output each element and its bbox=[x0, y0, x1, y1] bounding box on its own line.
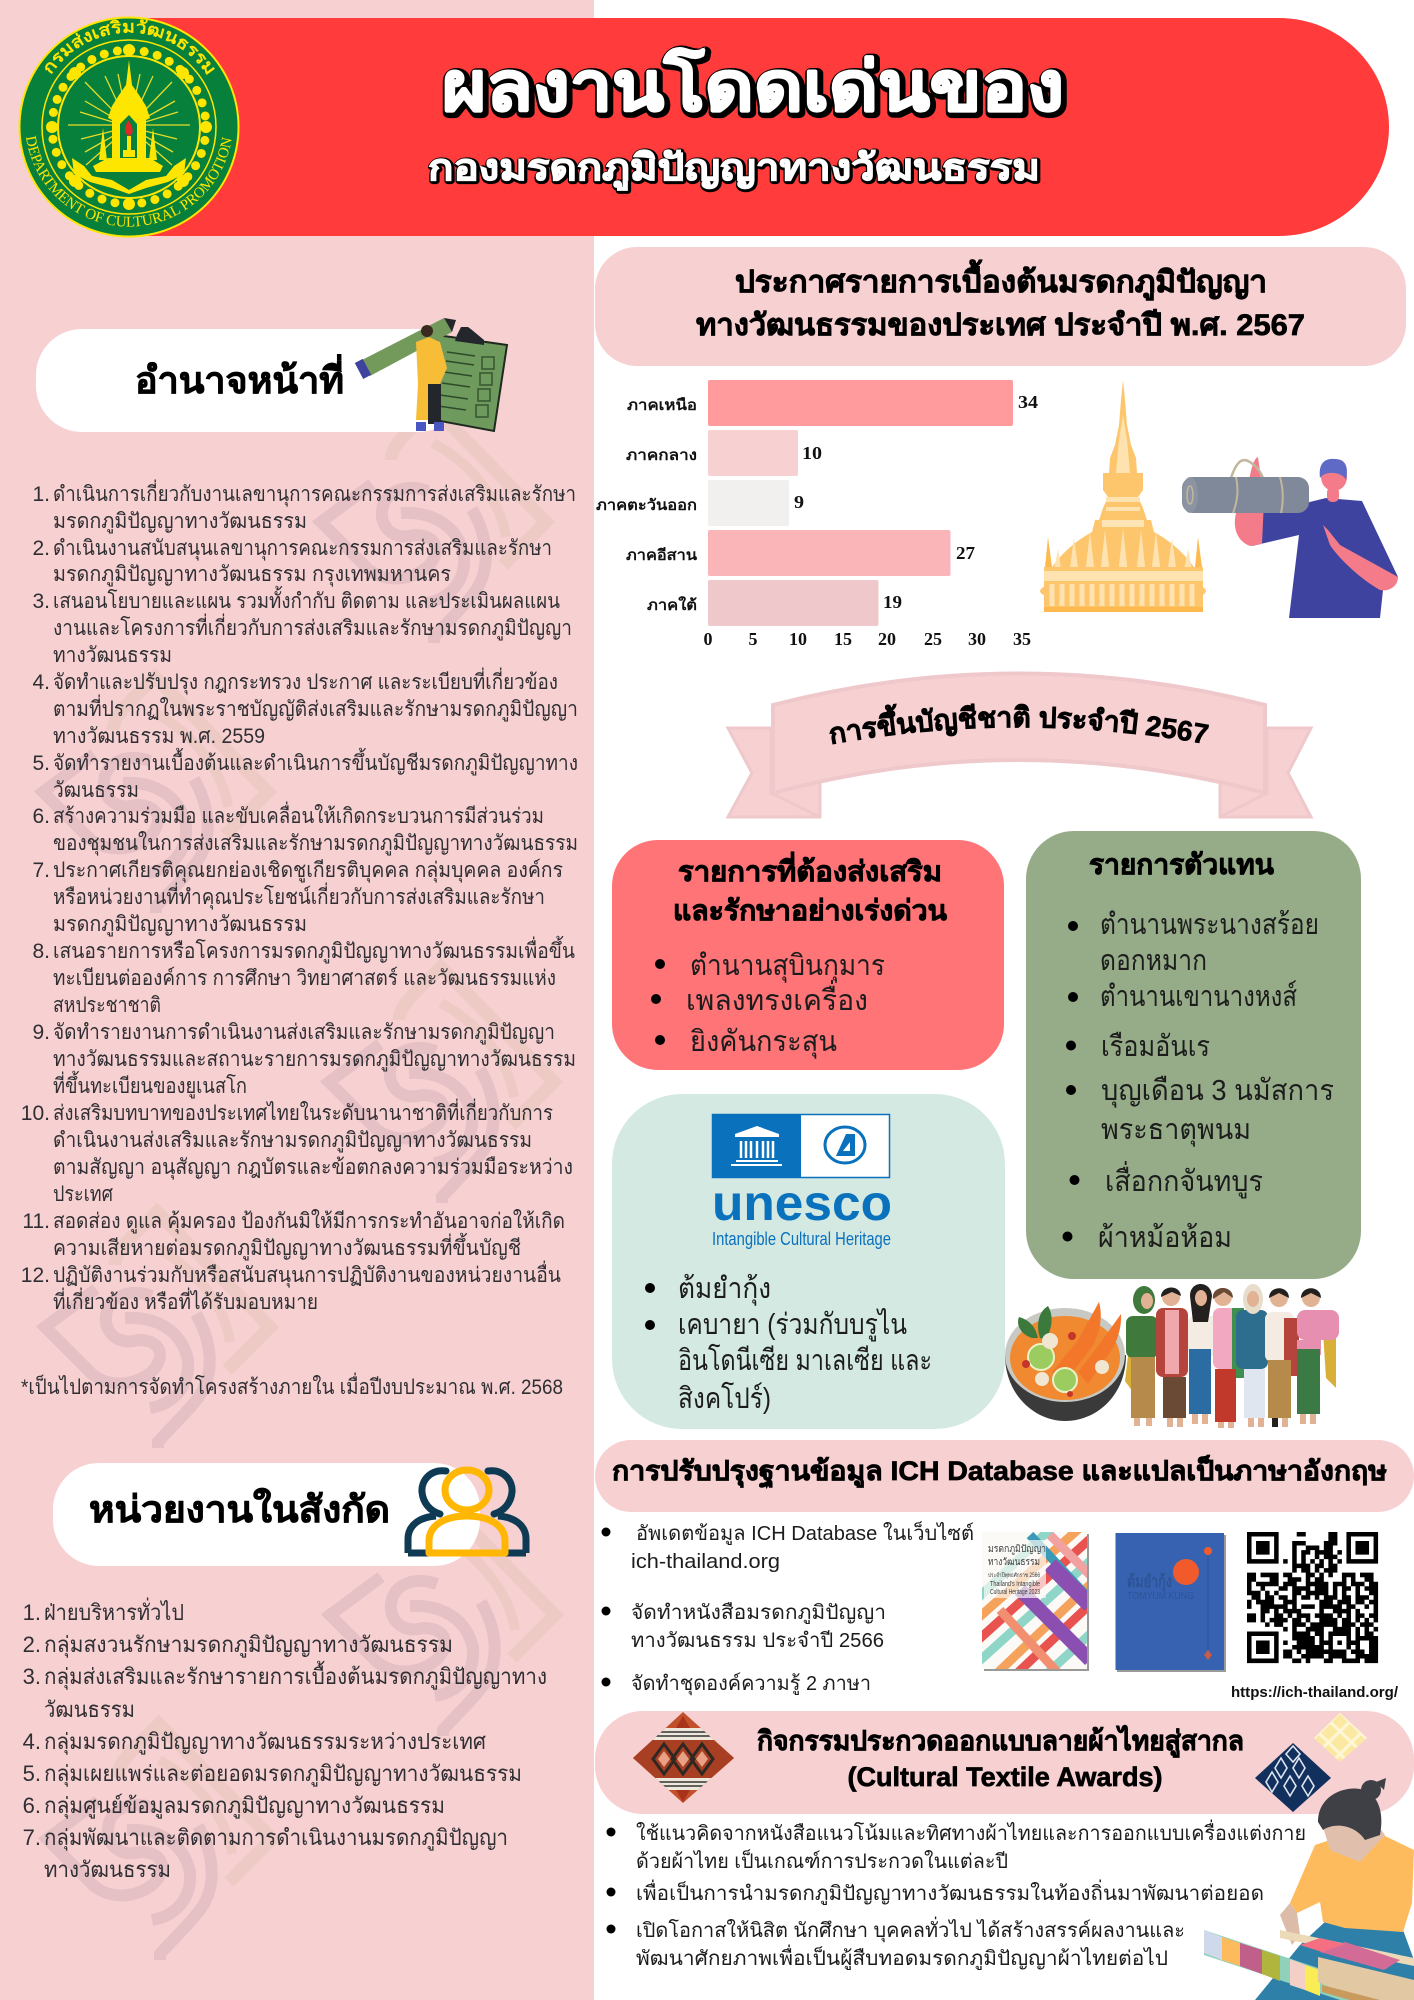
duties list: เสนอนโยบายและแผน รวมทั้งกำกับ ติดตาม และประเมินผลแผน bbox=[53, 586, 560, 613]
background: left pink column bbox=[0, 0, 594, 2000]
duties list: ทางวัฒนธรรม bbox=[53, 644, 172, 667]
textile awards bullet list: ด้วยผ้าไทย เป็นเกณฑ์การประกวดในแต่ละปี bbox=[636, 1848, 1008, 1873]
panel: representative items: รายการตัวแทน bbox=[1089, 849, 1274, 880]
duties list: 5. bbox=[32, 752, 50, 775]
duties list bbox=[21, 479, 578, 1314]
panel: representative items: เรือมอันเร bbox=[1101, 1031, 1210, 1063]
figure 3 bbox=[1188, 1284, 1220, 1424]
footnote: *เป็นไปตามการจัดทำโครงสร้างภายใน เมื่อปีงบประมาณ พ.ศ. 2568 bbox=[21, 1372, 563, 1399]
units list: 7. bbox=[23, 1825, 41, 1850]
subtitle: กองมรดกภูมิปัญญาทางวัฒนธรรม bbox=[429, 148, 1041, 192]
icon: department seal: กรมส่งเสริมวัฒนธรรม bbox=[45, 20, 215, 75]
icon: UNESCO ICH logo: unesco bbox=[712, 1175, 892, 1231]
duties list: เสนอรายการหรือโครงการมรดกภูมิปัญญาทางวัฒนธรรมเพื่อขึ้น bbox=[53, 936, 575, 964]
duties list: ทางวัฒนธรรมและสถานะรายการมรดกภูมิปัญญาทางวัฒนธรรม bbox=[53, 1048, 576, 1072]
bar chart: items per region: 0 bbox=[704, 629, 712, 649]
bar chart: items per region: ภาคเหนือ bbox=[627, 397, 697, 414]
book cover: Tom Yum Kung: TOMYUM KUNG bbox=[1127, 1591, 1194, 1602]
ICH database bullet list: จัดทำชุดองค์ความรู้ 2 ภาษา bbox=[631, 1672, 871, 1696]
icon: tom yum kung bowl bbox=[1005, 1302, 1126, 1421]
duties list: จัดทำรายงานเบื้องต้นและดำเนินการขึ้นบัญชีมรดกภูมิปัญญาทาง bbox=[53, 748, 578, 776]
ICH database bullet list bbox=[602, 1520, 974, 1696]
panel: preliminary inventory heading: ประกาศรายการเบื้องต้นมรดกภูมิปัญญา bbox=[735, 259, 1267, 301]
duties list: จัดทำรายงานการดำเนินงานส่งเสริมและรักษามรดกภูมิปัญญา bbox=[53, 1021, 555, 1045]
panel: preliminary inventory heading: ทางวัฒนธรรมของประเทศ ประจำปี พ.ศ. 2567 bbox=[696, 309, 1305, 342]
duties list: หรือหน่วยงานที่ทำคุณประโยชน์เกี่ยวกับการส่งเสริมและรักษา bbox=[53, 882, 545, 910]
duties list: มรดกภูมิปัญญาทางวัฒนธรรม bbox=[53, 913, 307, 937]
duties list: ดำเนินงานสนับสนุนเลขานุการคณะกรรมการส่งเสริมและรักษา bbox=[53, 537, 552, 561]
heading: affiliated units card: หน่วยงานในสังกัด bbox=[89, 1487, 390, 1530]
ICH database bullet list: ทางวัฒนธรรม ประจำปี 2566 bbox=[631, 1630, 884, 1652]
panel: Cultural Textile Awards heading: (Cultural Textile Awards) bbox=[848, 1762, 1162, 1792]
units list: 5. bbox=[23, 1761, 41, 1786]
icon: group of women in kebaya bbox=[1125, 1284, 1339, 1428]
duties list: วัฒนธรรม bbox=[53, 779, 139, 802]
header banner bbox=[130, 18, 1389, 236]
units list: กลุ่มเผยแพร่และต่อยอดมรดกภูมิปัญญาทางวัฒนธรรม bbox=[44, 1761, 522, 1787]
bar chart: items per region: 30 bbox=[968, 629, 986, 649]
website URL: https://ich-thailand.org/ bbox=[1231, 1684, 1399, 1701]
panel: representative items: เสื่อกกจันทบูร bbox=[1105, 1161, 1263, 1199]
duties list: มรดกภูมิปัญญาทางวัฒนธรรม กรุงเทพมหานคร bbox=[53, 563, 451, 587]
bar chart: items per region: ภาคตะวันออก bbox=[596, 497, 697, 514]
duties list: 4. bbox=[32, 671, 50, 694]
panel: representative items: พระธาตุพนม bbox=[1101, 1114, 1251, 1147]
panel: Cultural Textile Awards heading: กิจกรรมประกวดออกแบบลายผ้าไทยสู่สากล bbox=[757, 1725, 1244, 1758]
duties list: ดำเนินงานส่งเสริมและรักษามรดกภูมิปัญญาทางวัฒนธรรม bbox=[53, 1129, 532, 1153]
icon: group of people bbox=[408, 1470, 526, 1553]
panel: UNESCO representative items: สิงคโปร์) bbox=[678, 1381, 771, 1415]
textile awards bullet list: พัฒนาศักยภาพเพื่อเป็นผู้สืบทอดมรดกภูมิปัญญาผ้าไทยต่อไป bbox=[636, 1944, 1168, 1971]
duties list: 1. bbox=[32, 483, 50, 506]
duties list: ทางวัฒนธรรม พ.ศ. 2559 bbox=[53, 725, 265, 748]
bar chart: items per region: 10 bbox=[802, 443, 822, 463]
ICH database bullet list: ich-thailand.org bbox=[631, 1551, 780, 1573]
duties list: ประเทศ bbox=[53, 1183, 114, 1206]
units list: กลุ่มมรดกภูมิปัญญาทางวัฒนธรรมระหว่างประเทศ bbox=[44, 1729, 486, 1755]
panel: UNESCO representative items: เคบายา (ร่วมกับบรูไน bbox=[678, 1307, 907, 1342]
duties list: ของชุมชนในการส่งเสริมและรักษามรดกภูมิปัญญาทางวัฒนธรรม bbox=[53, 831, 578, 856]
illustration: woman weaving at a loom bbox=[1204, 1778, 1414, 2000]
icon: UNESCO ICH logo bbox=[712, 1114, 892, 1249]
bar chart: items per region: 15 bbox=[834, 629, 852, 649]
duties list: ทะเบียนต่อองค์การ การศึกษา วิทยาศาสตร์ และวัฒนธรรมแห่ง bbox=[53, 966, 556, 990]
units list: กลุ่มสงวนรักษามรดกภูมิปัญญาทางวัฒนธรรม bbox=[44, 1632, 453, 1658]
duties list: 11. bbox=[22, 1210, 50, 1233]
duties list: 10. bbox=[21, 1102, 50, 1125]
textile awards bullet list bbox=[606, 1819, 1306, 1971]
duties list: ประกาศเกียรติคุณยกย่องเชิดชูเกียรติบุคคล กลุ่มบุคคล องค์กร bbox=[53, 858, 563, 883]
panel: urgent safeguarding items bbox=[612, 840, 1004, 1070]
textile awards bullet list: เปิดโอกาสให้นิสิต นักศึกษา บุคคลทั่วไป ได้สร้างสรรค์ผลงานและ bbox=[636, 1916, 1185, 1943]
duties list: จัดทำและปรับปรุง กฎกระทรวง ประกาศ และระเบียบที่เกี่ยวข้อง bbox=[53, 667, 558, 695]
duties list: 8. bbox=[32, 940, 50, 963]
duties list: 3. bbox=[32, 590, 50, 613]
units list: ฝ่ายบริหารทั่วไป bbox=[44, 1597, 184, 1625]
icon: navy textile pattern bbox=[1255, 1743, 1331, 1812]
units list: 2. bbox=[23, 1632, 41, 1657]
bar chart: items per region bbox=[596, 380, 1038, 649]
book cover: Tom Yum Kung: ต้มยำกุ้ง bbox=[1127, 1572, 1172, 1592]
title: ผลงานโดดเด่นของ bbox=[444, 49, 1066, 127]
panel: representative items: ตำนานพระนางสร้อย bbox=[1100, 909, 1319, 941]
icon: yellow textile pattern bbox=[1314, 1713, 1367, 1762]
duties list: ดำเนินการเกี่ยวกับงานเลขานุการคณะกรรมการส่งเสริมและรักษา bbox=[53, 479, 576, 507]
duties list: งานและโครงการที่เกี่ยวกับการส่งเสริมและรักษามรดกภูมิปัญญา bbox=[53, 613, 572, 641]
icon: man carrying rolled mat bbox=[1182, 457, 1398, 618]
ICH database bullet list: จัดทำหนังสือมรดกภูมิปัญญา bbox=[631, 1602, 886, 1625]
book cover: ICH 2023: ประจำปีพุทธศักราช 2566 bbox=[988, 1571, 1041, 1579]
duties list: ที่เกี่ยวข้อง หรือที่ได้รับมอบหมาย bbox=[53, 1287, 318, 1314]
book cover: ICH 2023: Thailand's Intangible bbox=[990, 1581, 1040, 1588]
textile awards bullet list: เพื่อเป็นการนำมรดกภูมิปัญญาทางวัฒนธรรมในท้องถิ่นมาพัฒนาต่อยอด bbox=[636, 1879, 1264, 1906]
heading: duties card: อำนาจหน้าที่ bbox=[135, 354, 344, 401]
units list: วัฒนธรรม bbox=[44, 1697, 135, 1722]
panel: urgent safeguarding items: ยิงคันกระสุน bbox=[690, 1026, 837, 1059]
panel: representative items: ดอกหมาก bbox=[1100, 945, 1207, 977]
figure 6 bbox=[1265, 1288, 1299, 1427]
duties list: 2. bbox=[32, 537, 50, 560]
duties list: 12. bbox=[21, 1264, 50, 1287]
duties list: ตามสัญญา อนุสัญญา กฎบัตรและข้อตกลงความร่วมมือระหว่าง bbox=[53, 1156, 573, 1180]
units list: 4. bbox=[23, 1729, 41, 1754]
ICH database bullet list: อัพเดตข้อมูล ICH Database ในเว็บไซต์ bbox=[636, 1520, 974, 1546]
duties list: สอดส่อง ดูแล คุ้มครอง ป้องกันมิให้มีการกระทำอันอาจก่อให้เกิด bbox=[53, 1209, 565, 1234]
panel: UNESCO representative items bbox=[612, 1094, 1005, 1429]
duties list: มรดกภูมิปัญญาทางวัฒนธรรม bbox=[53, 510, 307, 534]
panel: urgent safeguarding items: เพลงทรงเครื่อง bbox=[686, 980, 868, 1017]
book cover: ICH 2023: มรดกภูมิปัญญา bbox=[988, 1544, 1046, 1555]
duties list: ปฏิบัติงานร่วมกับหรือสนับสนุนการปฏิบัติงานของหน่วยงานอื่น bbox=[53, 1260, 561, 1288]
units list bbox=[23, 1597, 547, 1882]
bar chart: items per region: 5 bbox=[748, 629, 758, 649]
bar chart: items per region: 34 bbox=[1018, 392, 1038, 412]
duties list: ส่งเสริมบทบาทของประเทศไทยในระดับนานาชาติที่เกี่ยวกับการ bbox=[53, 1098, 553, 1125]
book cover: ICH 2023 bbox=[982, 1532, 1089, 1671]
bar chart: items per region: 25 bbox=[924, 629, 942, 649]
decorative watermark motifs bbox=[43, 407, 555, 1960]
banner ribbon: national inventory bbox=[726, 672, 1314, 818]
units list: กลุ่มส่งเสริมและรักษารายการเบื้องต้นมรดกภูมิปัญญาทาง bbox=[44, 1661, 547, 1690]
panel: Cultural Textile Awards heading bbox=[595, 1711, 1414, 1814]
figure 5 bbox=[1236, 1284, 1268, 1427]
panel: UNESCO representative items: ต้มยำกุ้ง bbox=[678, 1273, 771, 1306]
figure 2 bbox=[1156, 1287, 1188, 1427]
panel: urgent safeguarding items: ตำนานสุบินกุมาร bbox=[690, 950, 885, 983]
icon: department seal bbox=[18, 16, 240, 238]
panel: ICH database heading: การปรับปรุงฐานข้อมูล ICH Database และแปลเป็นภาษาอังกฤษ bbox=[612, 1453, 1387, 1489]
duties list: 7. bbox=[32, 859, 50, 882]
panel: representative items bbox=[1026, 831, 1361, 1279]
units list: 1. bbox=[23, 1600, 41, 1625]
bar chart: items per region: 9 bbox=[794, 492, 804, 512]
panel: urgent safeguarding items: รายการที่ต้องส่งเสริม bbox=[678, 851, 942, 887]
units list: 6. bbox=[23, 1793, 41, 1818]
panel: representative items: บุญเดือน 3 นมัสการ bbox=[1101, 1075, 1334, 1108]
book cover: Tom Yum Kung bbox=[1116, 1533, 1226, 1672]
icon: department seal: DEPARTMENT OF CULTURAL PROMOTION bbox=[26, 136, 232, 227]
subtitle: กองมรดกภูมิปัญญาทางวัฒนธรรม bbox=[428, 147, 1040, 191]
icon: person with giant pencil and checklist bbox=[355, 318, 507, 431]
figure 1 bbox=[1125, 1286, 1158, 1426]
duties list: 6. bbox=[32, 805, 50, 828]
duties list: 9. bbox=[32, 1021, 50, 1044]
bar chart: items per region: 19 bbox=[883, 592, 902, 612]
figure 4 bbox=[1213, 1288, 1244, 1428]
units list: ทางวัฒนธรรม bbox=[44, 1857, 171, 1882]
icon: orange textile pattern bbox=[633, 1712, 735, 1804]
duties list: สร้างความร่วมมือ และขับเคลื่อนให้เกิดกระบวนการมีส่วนร่วม bbox=[53, 801, 544, 828]
panel: ICH database heading bbox=[595, 1440, 1414, 1512]
bar chart: items per region: ภาคใต้ bbox=[647, 596, 697, 614]
heading: affiliated units card bbox=[53, 1463, 480, 1566]
icon: UNESCO ICH logo: Intangible Cultural Heritage bbox=[712, 1229, 891, 1249]
duties list: ที่ขึ้นทะเบียนของยูเนสโก bbox=[53, 1071, 247, 1099]
panel: UNESCO representative items: อินโดนีเซีย มาเลเซีย และ bbox=[678, 1343, 932, 1377]
book cover: ICH 2023: ทางวัฒนธรรม bbox=[988, 1557, 1040, 1568]
figure 7 bbox=[1297, 1288, 1339, 1424]
panel: preliminary inventory heading bbox=[595, 247, 1406, 366]
units list: 3. bbox=[23, 1664, 41, 1689]
bar chart: items per region: ภาคอีสาน bbox=[626, 547, 698, 564]
title: ผลงานโดดเด่นของ bbox=[442, 47, 1064, 125]
book cover: ICH 2023: Cultural Heritage 2023 bbox=[990, 1589, 1040, 1596]
bar chart: items per region: 27 bbox=[956, 543, 975, 563]
banner ribbon: national inventory: การขึ้นบัญชีชาติ ประจำปี 2567 bbox=[829, 703, 1210, 744]
duties list: ตามที่ปรากฏในพระราชบัญญัติส่งเสริมและรักษามรดกภูมิปัญญา bbox=[53, 694, 578, 722]
duties list: สหประชาชาติ bbox=[53, 994, 161, 1017]
icon: golden stupa bbox=[1040, 380, 1206, 612]
panel: representative items: ผ้าหม้อห้อม bbox=[1098, 1222, 1232, 1254]
panel: urgent safeguarding items: และรักษาอย่างเร่งด่วน bbox=[673, 895, 947, 926]
bar chart: items per region: 20 bbox=[878, 629, 896, 649]
heading: duties card bbox=[36, 329, 464, 432]
units list: กลุ่มศูนย์ข้อมูลมรดกภูมิปัญญาทางวัฒนธรรม bbox=[44, 1793, 445, 1819]
textile awards bullet list: ใช้แนวคิดจากหนังสือแนวโน้มและทิศทางผ้าไทยและการออกแบบเครื่องแต่งกาย bbox=[636, 1819, 1306, 1845]
bar chart: items per region: 35 bbox=[1013, 629, 1031, 649]
QR code bbox=[1247, 1534, 1378, 1661]
bar chart: items per region: ภาคกลาง bbox=[626, 447, 697, 464]
panel: representative items: ตำนานเขานางหงส์ bbox=[1100, 980, 1297, 1013]
units list: กลุ่มพัฒนาและติดตามการดำเนินงานมรดกภูมิปัญญา bbox=[44, 1825, 508, 1851]
bar chart: items per region: 10 bbox=[789, 629, 807, 649]
duties list: ความเสียหายต่อมรดกภูมิปัญญาทางวัฒนธรรมที่ขึ้นบัญชี bbox=[53, 1233, 521, 1261]
